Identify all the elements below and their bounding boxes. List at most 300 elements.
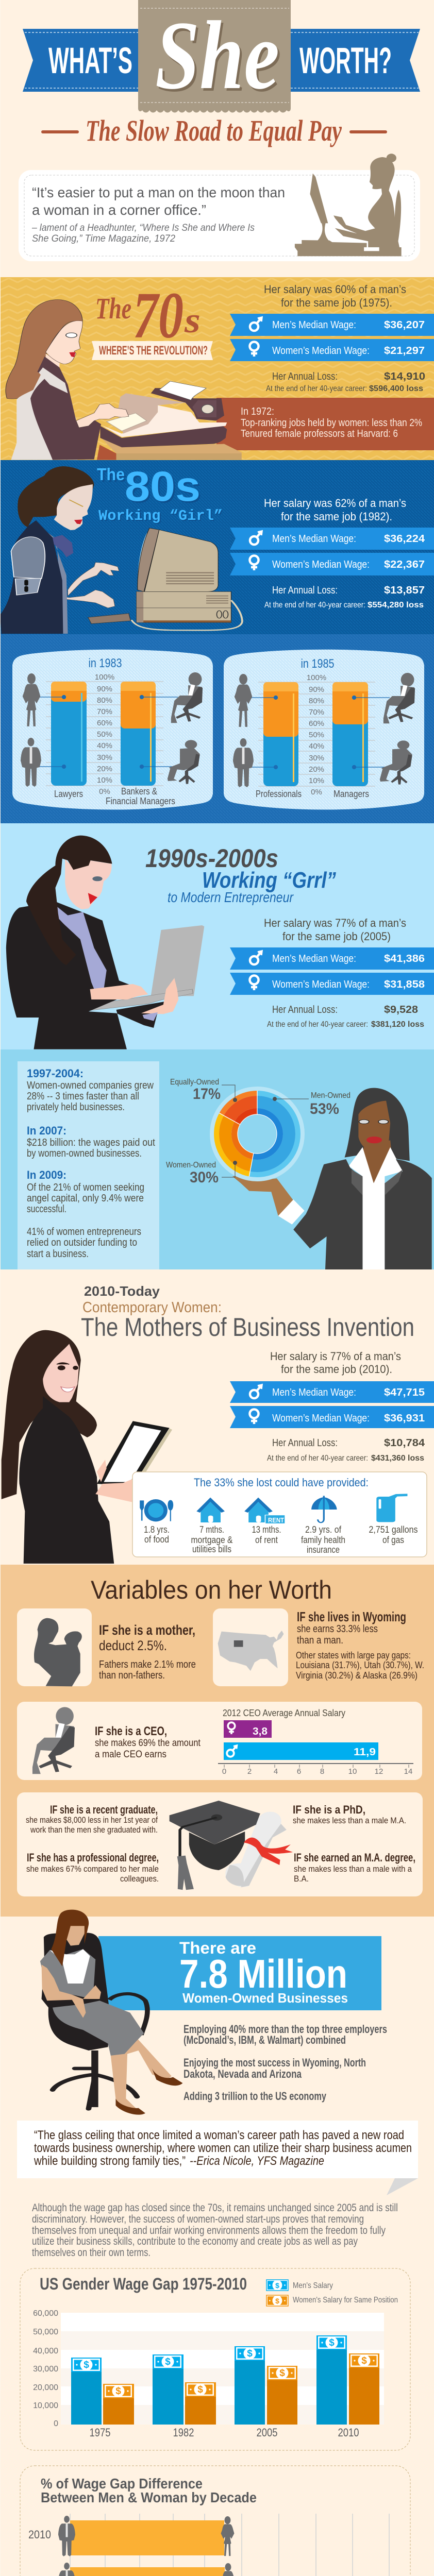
contemporary women: Contemporary Women:: [82, 1299, 222, 1316]
band 30-40k: [61, 2350, 384, 2368]
icon: rental house: [244, 1498, 285, 1523]
face: [65, 1922, 85, 1946]
salary stats: 2010: [230, 1350, 434, 1463]
x 1982: 1982: [173, 2426, 194, 2439]
axis labels: [222, 1767, 412, 1776]
attribution line 2: She Going,” Time Magazine, 1972: [32, 233, 175, 244]
1985 axis labels: [307, 673, 326, 796]
80s woman vest: [0, 520, 63, 634]
bars 1975: [71, 2358, 134, 2425]
y 30,000: 30,000: [33, 2365, 58, 2374]
fork: [140, 1500, 144, 1521]
rental door: [256, 1516, 261, 1522]
subtitle: [41, 114, 387, 147]
80s woman collar: [35, 522, 68, 634]
mortgage line 1: 7 mths.: [199, 1524, 224, 1535]
fact line: 28% -- 3 times faster than all: [27, 1091, 139, 1102]
men 1975 dollar: $: [84, 2360, 89, 2370]
professionals female share: [263, 682, 298, 737]
panel: what the 33% could have provided: [132, 1472, 427, 1557]
quote card: [19, 170, 420, 261]
managers highlight: [362, 693, 364, 782]
fact line: $218 billion: the wages paid out: [27, 1137, 155, 1148]
wyoming fact: she earns 33.3% less: [297, 1623, 378, 1635]
umbrella handle: [318, 1496, 324, 1522]
men's wage label: Men’s Median Wage:: [272, 533, 356, 545]
80s woman lips: [74, 519, 82, 524]
illustration: woman with tablet: [2, 1330, 172, 1564]
label: financial managers: Financial Managers: [106, 796, 175, 806]
lower arm and hand: [37, 590, 115, 608]
lawyers male share: [51, 682, 87, 786]
men-owned inner: [235, 1111, 280, 1157]
label 60%: 60%: [309, 719, 324, 728]
chart section stripes: [0, 634, 434, 823]
icon: male: [250, 531, 262, 545]
annual loss value: $10,784: [384, 1437, 425, 1449]
rent tag text: RENT: [268, 1516, 284, 1524]
men's wage value: $41,386: [384, 953, 425, 964]
fact: states: Enjoying the most success in Wyoming, North: [183, 2056, 366, 2069]
word: 80s: 80s: [125, 463, 201, 510]
subtitle dash left: [41, 130, 79, 133]
house roof: [196, 1498, 225, 1513]
bar 2010: [70, 2520, 224, 2555]
band 40-50k: [61, 2331, 384, 2350]
ceo fact: she makes 69% the amount: [95, 1738, 201, 1749]
icon: standing woman: [23, 673, 40, 726]
tablet body: [97, 1421, 170, 1485]
women's wage label: Women’s Median Wage:: [272, 979, 370, 990]
businesswoman face: [358, 1101, 390, 1153]
men 1975 note top: [71, 2358, 102, 2372]
tablet edge: [138, 1429, 172, 1479]
chart title: % of Wage Gap Difference: [41, 2476, 203, 2492]
item: rent: [252, 1524, 281, 1545]
chair armrest: [109, 1994, 147, 2035]
legend dollar women: $: [275, 2297, 279, 2305]
lawyers highlight: [81, 693, 82, 782]
band 20-30k: [61, 2368, 384, 2386]
men 2005 note: [236, 2347, 263, 2360]
label: lawyers: Lawyers: [54, 789, 83, 799]
1985 panel texture: [224, 650, 424, 810]
chair back: [42, 1933, 109, 2009]
businesswoman eyes: [359, 1120, 388, 1124]
salary stats: 1982: [230, 497, 434, 609]
title word shadow: She: She: [157, 4, 281, 112]
tassel cord: [180, 1818, 216, 1856]
fact line: angel capital, only 9.4% were: [27, 1193, 144, 1204]
illustration: 1990s woman with laptop: [6, 836, 204, 1049]
icon: female: [228, 1722, 235, 1734]
word: 70: 70: [133, 279, 183, 352]
icon: umbrella: [311, 1496, 337, 1522]
mortarboard: [170, 1801, 260, 1844]
bankers highlight: [150, 693, 152, 782]
woman 2010: [221, 2516, 234, 2556]
80s woman sleeve: [11, 537, 45, 579]
band 10-20k: [61, 2386, 384, 2405]
men's wage label: Men’s Median Wage:: [272, 319, 356, 331]
mother deduction: deduct 2.5%.: [99, 1638, 167, 1653]
recent graduate heading: IF she is a recent graduate,: [50, 1803, 158, 1816]
banner shape: [92, 341, 213, 360]
salary statement line 2: for the same job (2010).: [281, 1363, 392, 1376]
panel: women-owned facts: [18, 1061, 159, 1269]
fact line: relied on outsider funding to: [27, 1237, 137, 1248]
career loss label: At the end of her 40-year career:: [267, 1020, 368, 1029]
diploma ribbon: [244, 1838, 293, 1865]
title banner: [23, 0, 420, 112]
rental roof: [244, 1498, 273, 1513]
base seam: [137, 607, 231, 608]
career loss value: $596,400 loss: [369, 384, 423, 393]
mortgage line 2: mortgage &: [191, 1535, 233, 1545]
quote text: “It’s easier to put a man on the moon than: [32, 184, 285, 200]
quote line 3: while building strong family ties,”: [34, 2154, 186, 2168]
keyboard: [88, 614, 130, 624]
tick 14: 14: [404, 1767, 412, 1776]
lawyers cap: [51, 682, 87, 691]
men's wage value: $47,715: [384, 1387, 425, 1398]
lawyers female share: [51, 682, 87, 702]
arms: [42, 1964, 101, 2018]
food line 2: of food: [144, 1534, 169, 1545]
y 20,000: 20,000: [33, 2383, 58, 2392]
men 2010 note: [318, 2336, 345, 2349]
salary statement line 2: for the same job (1975).: [281, 296, 392, 309]
male bar: [224, 1742, 378, 1760]
donut hole: [238, 1114, 277, 1154]
house body: [201, 1502, 221, 1522]
women 1982 dollar: $: [197, 2384, 203, 2395]
legend border men: [266, 2280, 288, 2291]
annual loss label: Her Annual Loss:: [272, 371, 338, 382]
equally-owned mid: [225, 1102, 289, 1166]
base side strip: [137, 591, 143, 622]
annual loss label: Her Annual Loss:: [272, 1437, 338, 1449]
chart border: [20, 2268, 410, 2450]
woman connector right: [142, 697, 178, 698]
illustration: 70s woman at typewriter: [6, 300, 242, 460]
typewriter lower body: [100, 426, 227, 447]
label 10%: 10%: [309, 776, 324, 785]
diploma shading: [226, 1824, 287, 1887]
axis: [218, 1763, 413, 1764]
taupe tag: [138, 0, 291, 112]
women 2005 note: [269, 2367, 296, 2379]
monitor screen edge: [138, 533, 149, 584]
icon: seated woman: [171, 672, 203, 723]
women's wage label: Women’s Median Wage:: [272, 1413, 370, 1424]
value: 17%: 17%: [193, 1086, 221, 1103]
tick 4: 4: [274, 1767, 278, 1776]
word: The: The: [97, 465, 125, 484]
word: s: s: [184, 301, 201, 341]
80s stripes: [0, 460, 434, 634]
1990s woman eye: [92, 876, 103, 881]
man connector right: [142, 766, 178, 767]
illustration: seated businesswoman: [40, 1910, 182, 2115]
computer: [88, 528, 242, 630]
2010 woman hair: [2, 1330, 97, 1499]
man 2005: [58, 2563, 75, 2576]
ma fact: she makes less than a male with a: [294, 1864, 412, 1874]
x 1975: 1975: [90, 2426, 110, 2439]
icon: seated woman: [383, 673, 415, 723]
word shadow: Working Girl: Working “Girl”: [99, 509, 224, 526]
1983 panel shape: [12, 650, 213, 810]
subheading: to Modern Entrepreneur: [168, 889, 294, 905]
typewriter paper: [159, 381, 206, 400]
business facts: [183, 2023, 387, 2103]
upper arm and hand: [68, 563, 119, 596]
women's wage value: $21,297: [384, 345, 425, 357]
women's wage ribbon: [230, 973, 434, 995]
house door: [208, 1516, 213, 1522]
blue ribbon: [23, 29, 420, 92]
equally-owned inner: [235, 1111, 280, 1157]
item: mortgage: [191, 1524, 233, 1554]
red panel: [216, 398, 434, 450]
men's wage ribbon: [230, 947, 434, 970]
icon: graduation cap and diploma: [170, 1801, 293, 1890]
heading: the 70s: [92, 279, 213, 360]
men 1982 dollar: $: [165, 2357, 171, 2367]
heading: the 80s working girl: [97, 463, 224, 526]
woman connector right: [354, 697, 390, 698]
salary statement: Her salary was 62% of a man’s: [264, 497, 406, 510]
salary stats: 1975: [230, 283, 434, 393]
bars 2010: [316, 2335, 379, 2425]
gas can body: [376, 1497, 395, 1522]
section background: 1990s-2000s: [0, 823, 434, 1049]
icon: plate: [140, 1499, 173, 1521]
icon: male: [250, 951, 262, 964]
subtitle dash right: [349, 130, 387, 133]
2010 woman eyes: [57, 1363, 78, 1370]
shoes: [115, 2067, 182, 2115]
women 1982 note top: [185, 2382, 216, 2397]
umbrella canopy: [311, 1497, 337, 1510]
icon: female: [249, 555, 259, 570]
label 30%: 30%: [309, 754, 324, 762]
ribbon stitching: [25, 32, 419, 88]
computer base: [137, 591, 231, 622]
label 50%: 50%: [309, 731, 324, 739]
item: food: [144, 1524, 170, 1545]
legend note women: [266, 2295, 288, 2306]
blue box: [98, 1936, 381, 2010]
quote attribution: --Erica Nicole, YFS Magazine: [190, 2154, 324, 2168]
tablet: [97, 1421, 172, 1485]
segment separators: [219, 1091, 257, 1177]
legend dollar men: $: [275, 2281, 279, 2290]
label 100%: 100%: [307, 673, 326, 682]
heading 2009: In 2009:: [27, 1168, 66, 1181]
speech bubble: [17, 2121, 418, 2178]
women's wage label: Women’s Median Wage:: [272, 345, 370, 357]
chart: business ownership donut: [166, 1078, 350, 1186]
men 2005 bar: [235, 2346, 265, 2425]
label 80%: 80%: [97, 696, 112, 705]
disk drives: [216, 611, 228, 618]
salary statement: Her salary was 77% of a man’s: [264, 917, 406, 929]
career loss value: $381,120 loss: [371, 1020, 424, 1029]
chart: us gender wage gap: [20, 2268, 410, 2450]
connector dots: [62, 696, 144, 769]
chair seat: [48, 2006, 109, 2050]
women's wage value: $22,367: [384, 559, 425, 570]
gas can spout: [389, 1494, 407, 1499]
bar: managers: [332, 682, 368, 786]
career loss value: $431,360 loss: [371, 1454, 424, 1463]
men 1982 note top: [153, 2354, 183, 2369]
fact line: successful.: [27, 1204, 66, 1215]
career loss label: At the end of her 40-year career:: [267, 1454, 368, 1463]
women's wage value: $31,858: [384, 979, 425, 990]
map outline: [218, 1631, 283, 1671]
women 1982 bar: [185, 2382, 216, 2425]
laptop keyboard: [89, 989, 193, 1011]
1990s woman hair: [26, 836, 112, 965]
laptop screen: [151, 925, 204, 996]
title word: WHAT'S: WHAT’S: [48, 41, 132, 81]
label: bankers: Bankers &: [121, 786, 157, 796]
women's wage ribbon: [230, 553, 434, 575]
label 30%: 30%: [97, 753, 112, 762]
white top: [50, 1949, 90, 1984]
female value: 3,8: [253, 1726, 268, 1737]
label 10%: 10%: [97, 776, 112, 785]
annual loss label: Her Annual Loss:: [272, 1004, 338, 1015]
professionals cap: [263, 682, 298, 691]
fact line: by women-owned businesses.: [27, 1148, 142, 1159]
chair pole: [91, 2050, 98, 2107]
band 0-10k: [61, 2405, 384, 2425]
gas line 2: of gas: [382, 1535, 404, 1545]
word: Working Girl: Working “Girl”: [98, 507, 223, 524]
wyoming card: [213, 1608, 288, 1686]
men-owned outer: [216, 1093, 298, 1175]
rent tag: [265, 1515, 285, 1523]
women 1975 note top: [103, 2384, 134, 2398]
bar: lawyers: [51, 682, 87, 786]
x 2005: 2005: [257, 2426, 277, 2439]
2010 woman jacket: [19, 1396, 114, 1564]
gas line 1: 2,751 gallons: [369, 1524, 418, 1535]
fact: economy: Adding 3 trillion to the US economy: [183, 2090, 327, 2103]
businesswoman lapels: [352, 1170, 403, 1195]
monitor body: [144, 530, 218, 591]
salary statement line 2: for the same job (1982).: [281, 510, 392, 523]
base foot: [143, 620, 231, 622]
phd fact: she makes less than a male M.A.: [293, 1816, 406, 1825]
quote text line 2: a woman in a corner office.”: [32, 202, 206, 218]
plate rim: [144, 1499, 168, 1521]
businesswoman neck: [362, 1140, 392, 1183]
label 20%: 20%: [309, 765, 324, 774]
label 60%: 60%: [97, 719, 112, 727]
legend border women: [266, 2295, 288, 2306]
label: women-owned: Women-Owned: [166, 1161, 216, 1170]
80s woman glasses: [69, 500, 83, 506]
chart title: 2012 CEO Average Annual Salary: [223, 1708, 345, 1718]
label 2010: 2010: [28, 2528, 51, 2541]
heading 1997-2004: 1997-2004:: [27, 1067, 84, 1080]
table top: [100, 437, 242, 453]
typewriter table: [97, 437, 242, 460]
cap button: [211, 1815, 222, 1821]
label 40%: 40%: [97, 741, 112, 750]
men 1975 note: [73, 2359, 100, 2371]
recent graduate fact line 2: work than the men she graduated with.: [30, 1825, 158, 1835]
connectors: [37, 696, 178, 769]
label 20%: 20%: [97, 765, 112, 773]
career loss label: At the end of her 40-year career:: [264, 601, 365, 609]
80s woman hair: [18, 466, 94, 527]
insurance line 2: family health: [301, 1535, 345, 1545]
panel: 1983 bar chart: [12, 650, 213, 810]
gas can highlight: [379, 1499, 381, 1509]
men's wage label: Men’s Median Wage:: [272, 1387, 356, 1398]
hair: [51, 1910, 89, 1967]
panel: if she is a mother: [17, 1608, 196, 1686]
1985 gridlines: [258, 682, 375, 786]
panel: opening quote: [19, 154, 420, 261]
y 40,000: 40,000: [33, 2347, 58, 2355]
woman 2005: [222, 2563, 235, 2576]
title word: She: She: [155, 2, 279, 110]
ceo heading: IF she is a CEO,: [95, 1724, 167, 1738]
bankers male share: [121, 682, 156, 786]
legend note men: [266, 2280, 288, 2291]
summary line 2: discriminatory. However, the success of women-owned start-ups proves that removing: [32, 2213, 364, 2225]
annual loss value: $9,528: [384, 1004, 418, 1015]
bar 2005: [70, 2567, 225, 2576]
donut rings: [216, 1093, 298, 1175]
table front: [116, 453, 242, 460]
illustration: 80s woman: [0, 466, 242, 634]
man connector left: [249, 767, 276, 768]
1983 heading: in 1983: [89, 656, 122, 670]
heading: variables on her worth: Variables on her Worth: [91, 1575, 332, 1604]
7.8 million: 7.8 Million: [179, 1951, 347, 1996]
label 90%: 90%: [97, 685, 112, 693]
item: gas: [369, 1524, 418, 1545]
2010 woman hands: [95, 1460, 147, 1504]
women 2010 dollar: $: [361, 2355, 367, 2366]
70s woman dress: [11, 367, 77, 460]
women-owned businesses: Women-Owned Businesses: [182, 1990, 348, 2006]
1983 axis labels: [95, 673, 114, 796]
women 1982 note: [187, 2383, 214, 2396]
salary statement line 2: for the same job (2005): [282, 930, 391, 943]
skirt: [53, 2001, 144, 2056]
1990s woman hands: [90, 978, 178, 1014]
rent line 1: 13 mths.: [252, 1524, 281, 1535]
y 50,000: 50,000: [33, 2328, 58, 2336]
leader: equally-owned: [222, 1085, 235, 1100]
label: equally-owned: Equally-Owned: [170, 1078, 219, 1087]
fathers fact: Fathers make 2.1% more: [99, 1659, 196, 1670]
y 60,000: 60,000: [33, 2309, 58, 2318]
women 1975 dollar: $: [115, 2386, 121, 2397]
section background: variables: [0, 1565, 434, 1917]
tick 8: 8: [320, 1767, 324, 1776]
icon: standing woman: [235, 674, 252, 727]
